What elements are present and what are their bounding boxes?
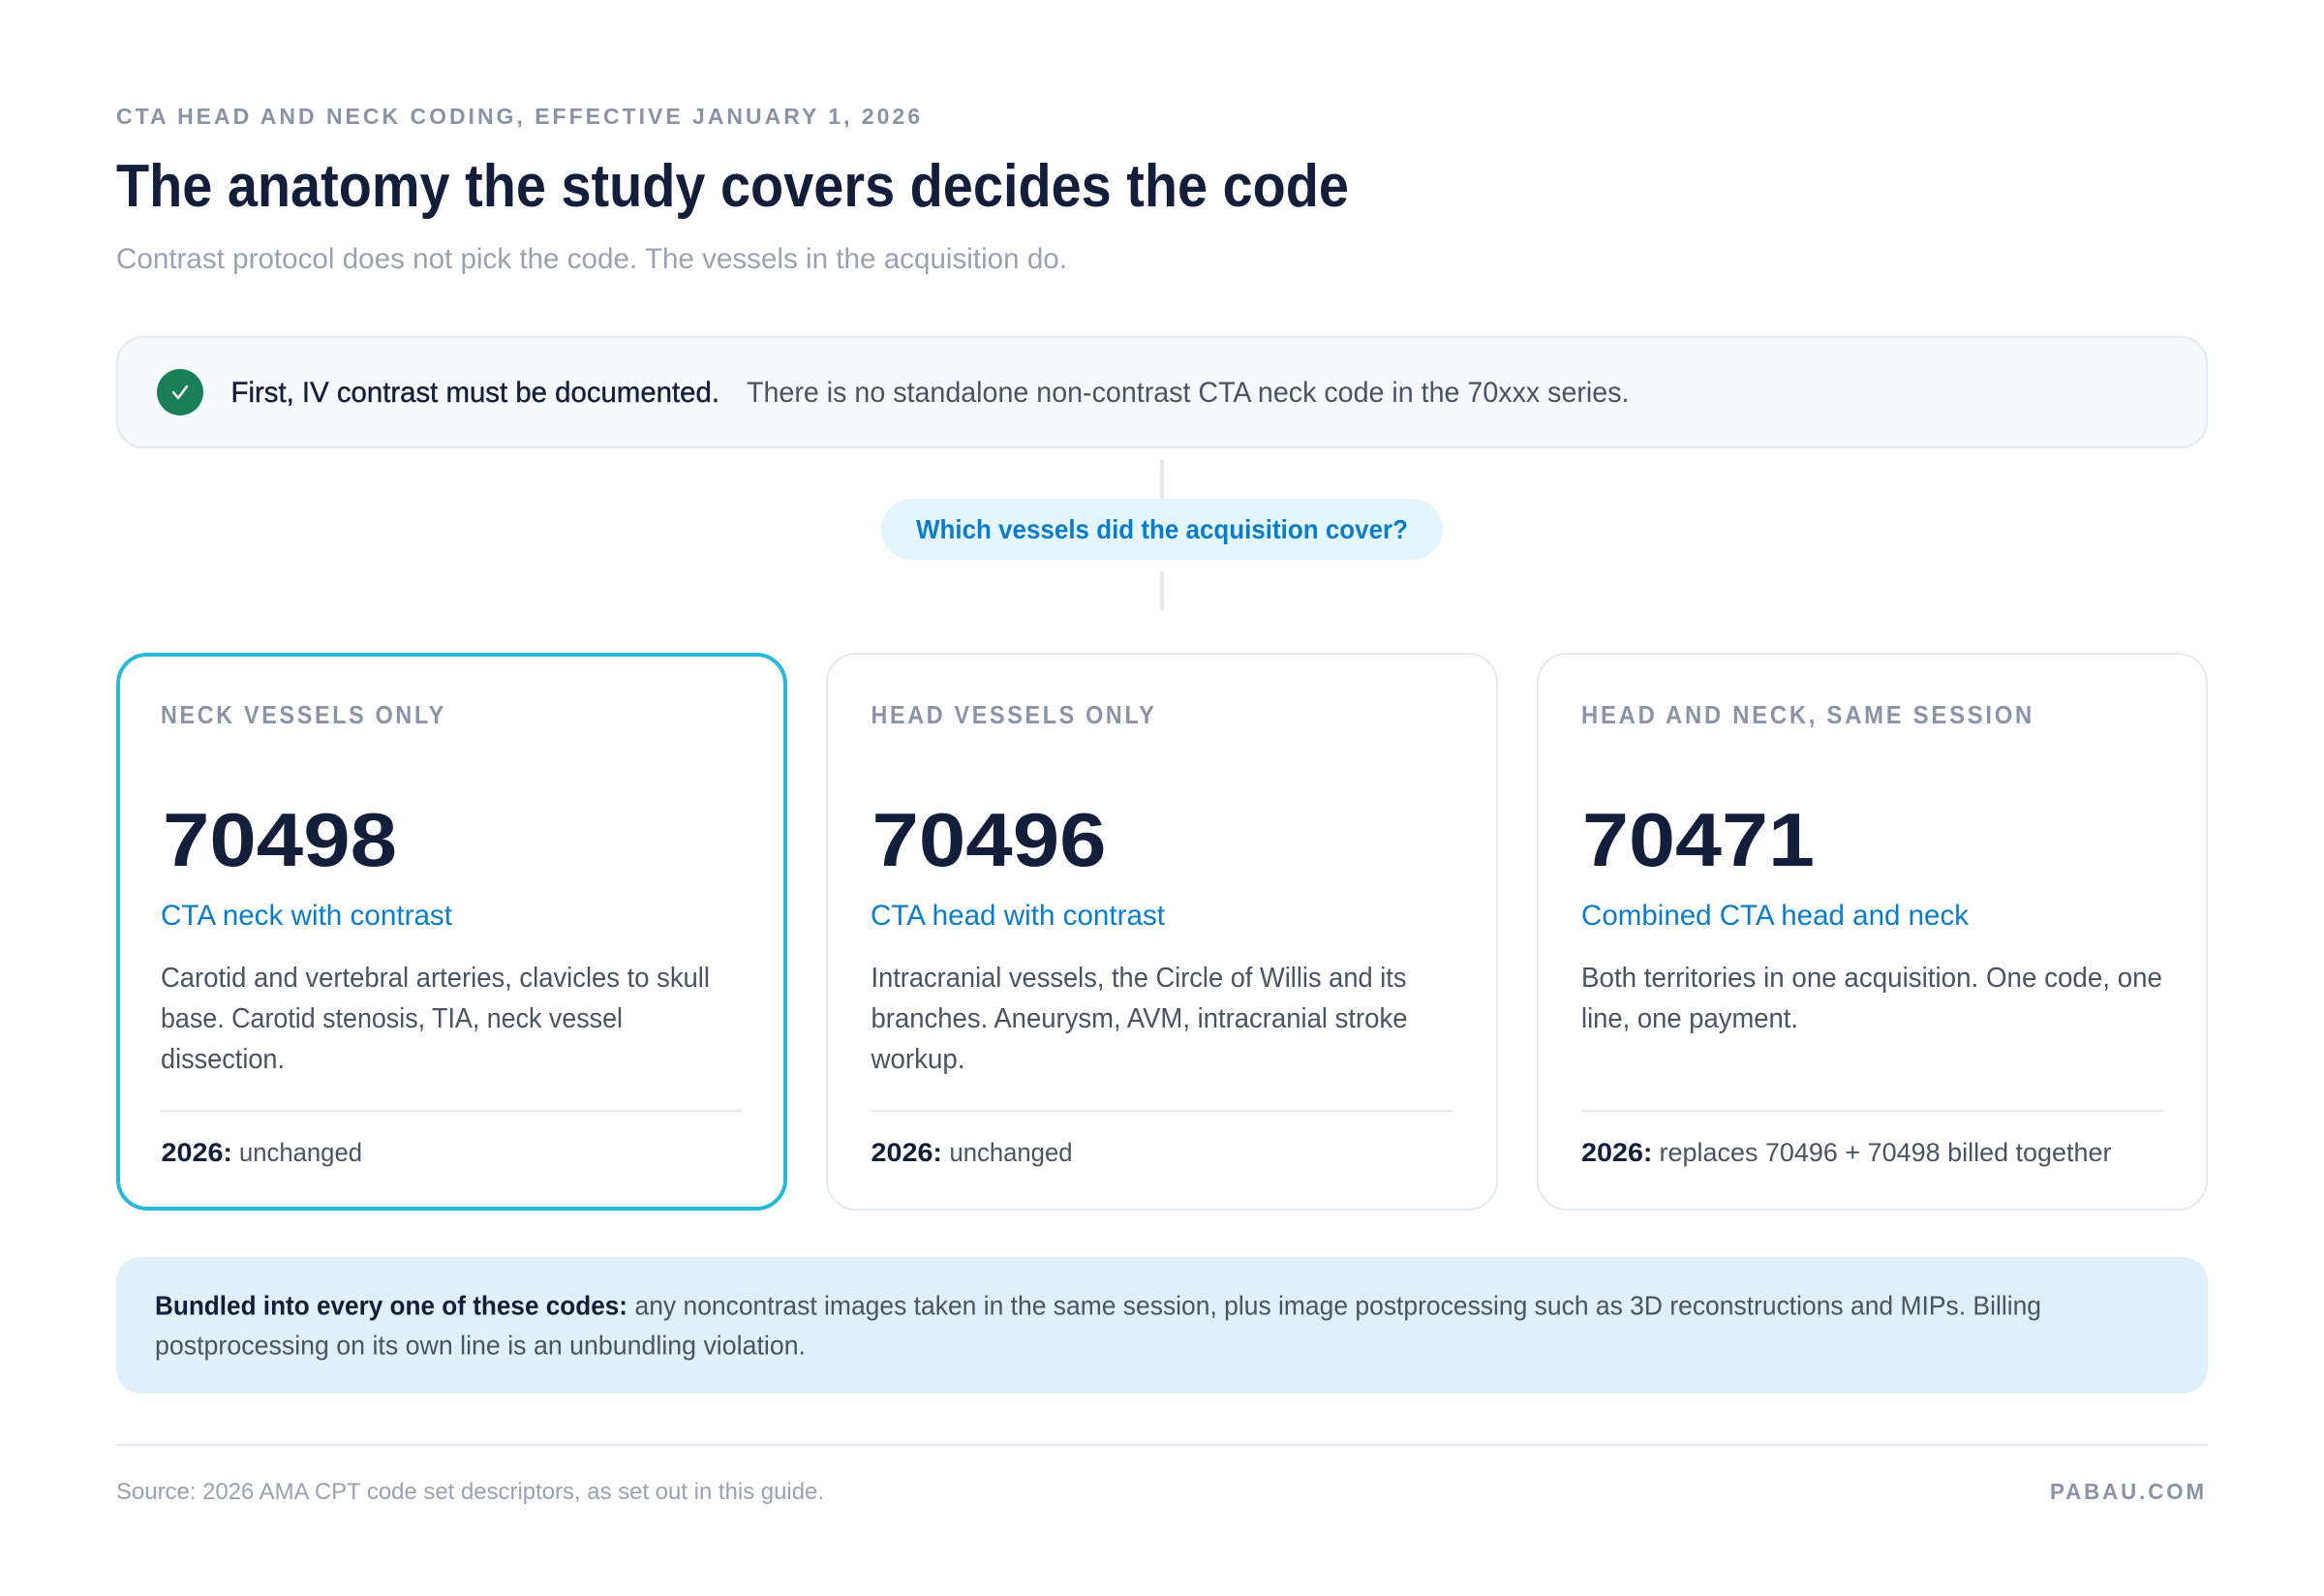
code name: CTA head with contrast: [871, 900, 1166, 932]
card description: dissection.: [161, 1044, 285, 1075]
question pill: [881, 499, 1443, 560]
card label: HEAD AND NECK, SAME SESSION: [1581, 700, 2034, 729]
card label: HEAD VESSELS ONLY: [872, 700, 1156, 729]
2026 status: replaces 70496 + 70498 billed together: [1660, 1138, 2112, 1167]
card description: workup.: [871, 1044, 964, 1075]
panel: head and neck, same session: [1538, 654, 2207, 1210]
panel: head vessels only: [827, 654, 1497, 1210]
2026 status: unchanged: [949, 1138, 1073, 1167]
code number: 70498: [163, 797, 397, 882]
banner lead text: First, IV contrast must be documented.: [230, 377, 719, 409]
card description: Carotid and vertebral arteries, clavicles to skull: [161, 963, 710, 994]
arrow: connector below question: [1160, 571, 1164, 610]
2026 status: unchanged: [239, 1138, 362, 1167]
callout: bundling note: [116, 1257, 2208, 1394]
title: The anatomy the study covers decides the code: [116, 153, 1349, 220]
card description: [1581, 963, 2162, 1034]
card description: base. Carotid stenosis, TIA, neck vessel: [161, 1003, 623, 1034]
icon: green check: [157, 369, 203, 415]
code name: CTA neck with contrast: [161, 900, 453, 932]
card description: branches. Aneurysm, AVM, intracranial stroke: [872, 1003, 1408, 1034]
callout: bundling note: postprocessing on its own line is an unbundling violation.: [155, 1331, 806, 1360]
brand: PABAU.COM: [2050, 1479, 2207, 1504]
banner detail text: There is no standalone non-contrast CTA neck code in the 70xxx series.: [747, 377, 1629, 409]
card description: Intracranial vessels, the Circle of Willis and its: [872, 963, 1406, 994]
2026 status: 2026:: [872, 1138, 942, 1167]
question pill: Which vessels did the acquisition cover?: [916, 514, 1408, 544]
2026 status: 2026:: [1581, 1138, 1652, 1167]
card description: Both territories in one acquisition. One code, one: [1581, 963, 2162, 994]
source note: Source: 2026 AMA CPT code set descriptors, as set out in this guide.: [116, 1479, 824, 1505]
code number: 70496: [872, 797, 1106, 882]
card description: line, one payment.: [1581, 1003, 1798, 1034]
subtitle: Contrast protocol does not pick the code. The vessels in the acquisition do.: [116, 243, 1067, 275]
2026 status: 2026:: [161, 1138, 232, 1167]
card label: NECK VESSELS ONLY: [161, 700, 446, 729]
2026 status: [161, 1138, 362, 1167]
code number: 70471: [1582, 797, 1815, 882]
2026 status: [872, 1138, 1073, 1167]
card description: [871, 963, 1408, 1075]
arrow: connector above question: [1160, 460, 1164, 499]
panel: neck vessels only: [118, 655, 785, 1209]
panel: IV contrast prerequisite banner: [117, 337, 2207, 447]
code name: Combined CTA head and neck: [1581, 900, 1970, 932]
callout: bundling note: Bundled into every one of these codes:: [155, 1290, 627, 1321]
card description: [161, 963, 710, 1075]
eyebrow: CTA HEAD AND NECK CODING, EFFECTIVE JANUARY 1, 2026: [116, 104, 923, 129]
callout: bundling note: any noncontrast images taken in the same session, plus image postprocessing such as 3D reconstructions and MIPs. Billing: [635, 1290, 2041, 1321]
